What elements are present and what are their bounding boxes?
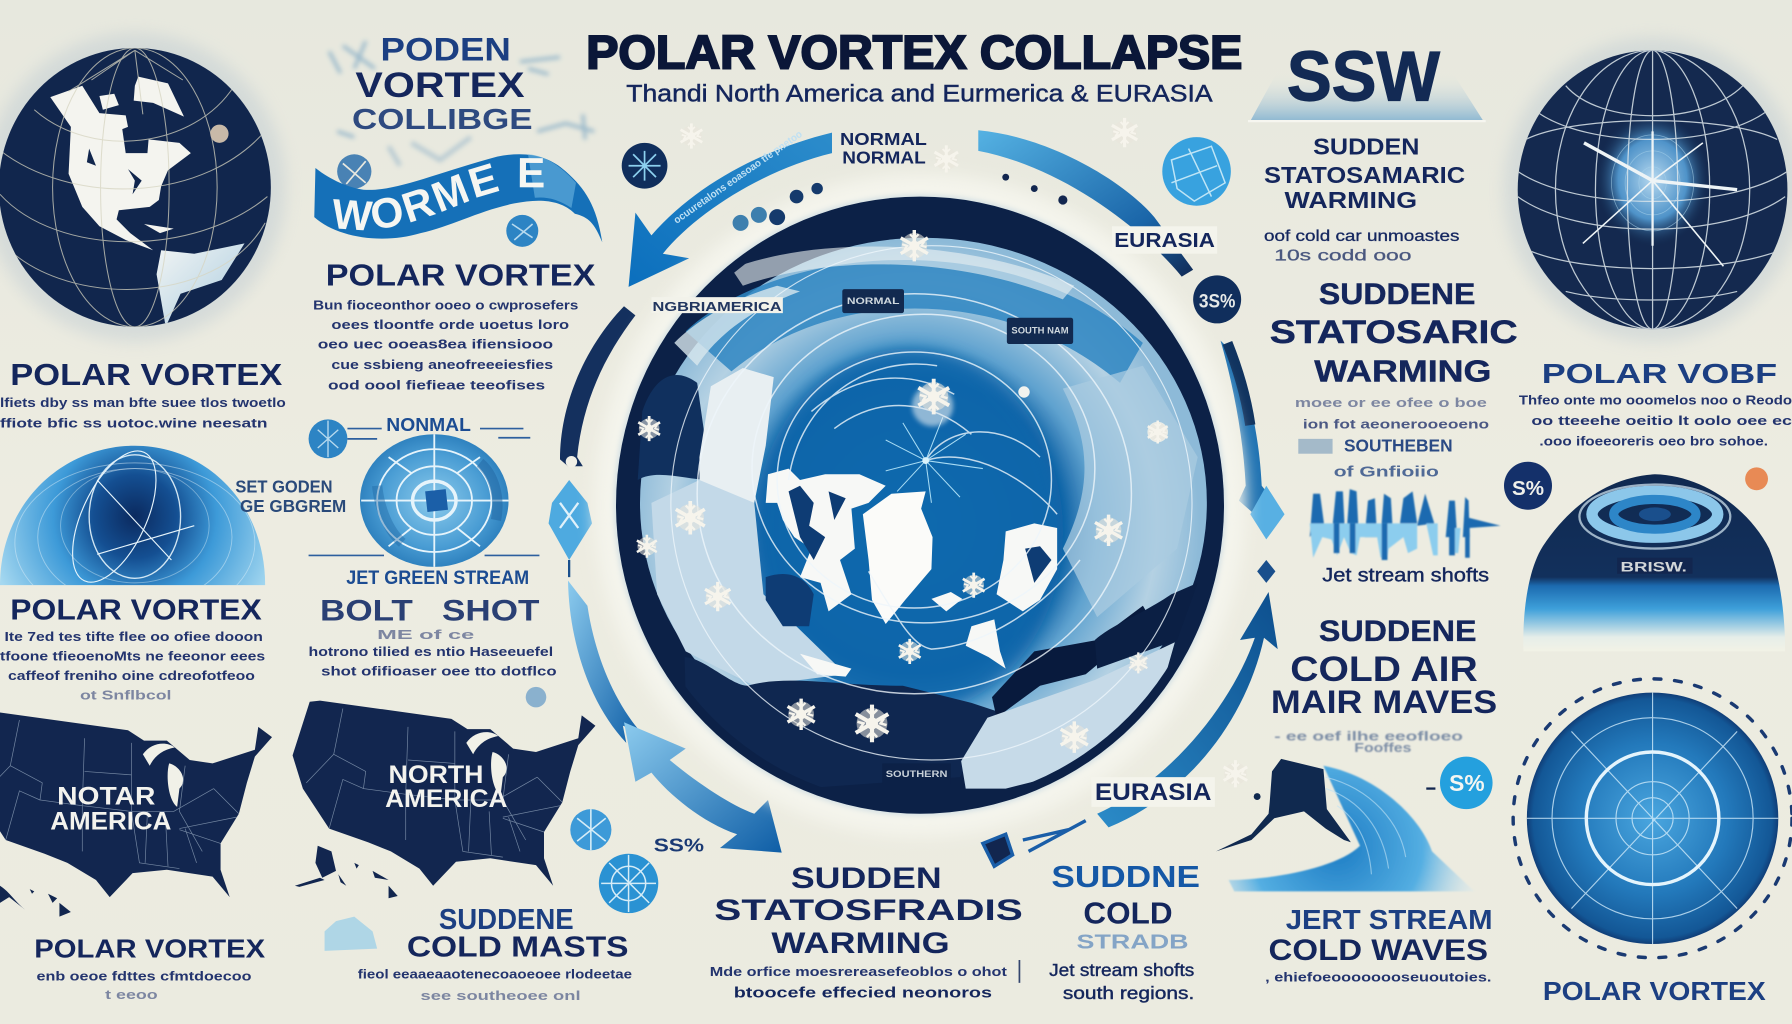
arrow: right band with ornament <box>1221 341 1285 583</box>
text: sudden cold masts: fieol eeaaeaaotenecoaoeoee rlodeetae <box>358 966 632 981</box>
text: polar vortex 4: Bun fioceonthor ooeo o cwprosefers <box>313 298 578 313</box>
heading: poden vortex collapse: VORTEX <box>355 65 525 105</box>
text: polar vortex 2: tfoone tfieoenoMts ne feeonor eees <box>0 649 265 664</box>
text: suddene statosaric warming: of Gnfioiio <box>1334 465 1439 481</box>
text: polar vortex 2: ot Snflbcol <box>80 687 171 702</box>
icon: vortex dome <box>0 446 266 586</box>
title: POLAR VORTEX COLLAPSE <box>586 27 1242 79</box>
icons around the disc: 3S% <box>1199 290 1235 312</box>
snowflakes on disc <box>637 230 1168 753</box>
text: polar vortex 1: ffiote bfic ss uotoc.wine neesatn <box>0 415 267 430</box>
text: sudden cold masts: SUDDENE <box>439 904 574 936</box>
text: polar vortex 3: enb oeoe fdttes cfmtdoecoo <box>37 969 251 984</box>
ribbon: worme: WORME E <box>333 158 544 230</box>
archipelago <box>766 469 886 611</box>
heading: poden vortex collapse <box>329 32 594 189</box>
map: left north america: NOTAR <box>57 783 155 811</box>
label: set goden: GE GBGREM <box>240 496 346 516</box>
text: jet stream bolt shot: ME of ce <box>377 627 474 642</box>
text: suddene cold air: Fooffes <box>1354 741 1411 755</box>
text: polar vortex 4: cue ssbieng aneofreeeiesfies <box>331 357 553 372</box>
text: sudden stratospheric warming center: WARMING <box>771 927 950 960</box>
text: sudden statosamaric warming <box>1264 133 1465 265</box>
icon: vortex dome right: BRISW. <box>1621 559 1687 574</box>
disc labels: SOUTH NAM <box>1011 326 1069 336</box>
map: north america <box>293 701 595 898</box>
text: sudden statosamaric warming: oof cold car unmoastes <box>1264 228 1459 245</box>
text: polar vobf: Thfeo onte mo ooomelos noo o Reodo <box>1519 393 1792 408</box>
streak band top <box>686 260 1143 383</box>
text: suddne cold stradb: SUDDNE <box>1051 859 1200 894</box>
text: sudden cold masts: see southeoee onl <box>421 988 581 1003</box>
text: suddene statosaric warming: SUDDENE <box>1319 278 1475 311</box>
globe: vortex top right <box>1504 38 1792 342</box>
icon: normal globe with label <box>309 414 539 567</box>
label: jet stream shifts: Jet stream shofts <box>1322 565 1489 587</box>
text: jet stream bolt shot: BOLT SHOT <box>320 595 539 628</box>
text: sudden statosamaric warming: 10s codd ooo <box>1274 248 1412 265</box>
icons: small circles and ss%: SS% <box>654 834 704 855</box>
burst <box>886 417 983 503</box>
text: polar vortex 2: caffeof freniho oine cdreofotfeoo <box>8 668 255 683</box>
text: sudden stratospheric warming center: SUDDEN <box>791 862 942 895</box>
heading: ssw: SSW <box>1287 38 1440 117</box>
text: jet stream bolt shot <box>309 567 557 678</box>
arrow: top left <box>629 129 832 287</box>
labels: normal and eurasia <box>840 129 1217 807</box>
text: polar vobf: .ooo ifoeeoreris oeo bro sohoe. <box>1539 434 1768 449</box>
icon: alaska with wave <box>1216 757 1493 891</box>
text: suddne cold stradb: COLD <box>1083 895 1173 930</box>
text: sudden stratospheric warming center: btoocefe effecied neonoros <box>734 986 992 1002</box>
text: polar vortex 4: oees tloontfe orde uoetus loro <box>331 317 569 332</box>
text: sudden statosamaric warming: STATOSAMARIC <box>1264 162 1465 188</box>
text: jert stream cold waves: COLD WAVES <box>1269 934 1488 967</box>
labels: normal and eurasia: EURASIA <box>1114 229 1215 252</box>
text: polar vortex 4: oeo uec ooeas8ea ifiensiooo <box>318 337 553 352</box>
text: suddne cold stradb: STRADB <box>1077 931 1189 954</box>
text: sudden statosamaric warming: WARMING <box>1285 187 1417 213</box>
text: jert stream cold waves: , ehiefoeoooooooseuoutoies. <box>1265 970 1491 985</box>
text: polar vortex 4: POLAR VORTEX <box>326 258 596 293</box>
map: left north america <box>0 712 272 917</box>
text: jert stream cold waves: JERT STREAM <box>1286 904 1493 935</box>
text: polar vobf: POLAR VOBF <box>1542 358 1777 389</box>
title <box>586 27 1242 108</box>
text: suddene statosaric warming <box>1270 278 1518 481</box>
text: polar vortex 2: POLAR VORTEX <box>10 594 262 626</box>
text: suddene cold air: COLD AIR <box>1290 649 1478 689</box>
arrow: left navy band <box>560 306 635 467</box>
text: polar vortex 4 <box>313 258 596 393</box>
text: suddne cold stradb: south regions. <box>1063 983 1194 1003</box>
map: north america: AMERICA <box>385 785 507 813</box>
text: suddene statosaric warming: ion fot aeonerooeoeno <box>1303 417 1489 432</box>
text: polar vortex 2 <box>0 594 265 702</box>
text: sudden cold masts <box>325 904 632 1003</box>
text: jet stream bolt shot: hotrono tilied es ntio Haseeuefel <box>309 644 553 659</box>
label: set goden <box>235 477 346 516</box>
pale left land <box>699 368 774 503</box>
dark left land <box>638 375 711 480</box>
ribbon: worme <box>314 154 602 247</box>
text: polar vobf <box>1519 358 1792 449</box>
scandinavia <box>997 523 1057 611</box>
disc labels <box>651 289 1073 784</box>
arrow: bottom right <box>1097 592 1278 827</box>
text: jet stream bolt shot: shot ofifioaser oee tto dotflco <box>321 663 557 678</box>
disc labels: NORMAL <box>847 296 900 306</box>
map: left north america: AMERICA <box>50 808 171 836</box>
text: polar vortex 3: POLAR VORTEX <box>34 934 266 964</box>
jet lines <box>671 246 1192 760</box>
text: suddene cold air: MAIR MAVES <box>1271 684 1497 720</box>
text: polar vortex 1: POLAR VORTEX <box>10 357 283 392</box>
icon: vortex dome right <box>1523 474 1785 651</box>
text: polar vortex 1: lfiets dby ss man bfte suee tlos twoetlo <box>0 395 286 410</box>
text: suddene cold air <box>1271 615 1497 755</box>
text: polar vortex 1 <box>0 357 286 430</box>
central polar disc <box>594 174 1246 837</box>
chart: jet stream waveform <box>1310 489 1501 560</box>
right pale streak <box>1063 366 1198 617</box>
icons around the disc <box>622 118 1247 866</box>
text: suddene cold air: SUDDENE <box>1319 615 1477 648</box>
icon: blue polar globe <box>1513 679 1792 958</box>
deep blue core <box>754 349 1063 714</box>
text: suddne cold stradb: Jet stream shofts <box>1049 960 1194 980</box>
label: polar vortex bottom right: POLAR VORTEX <box>1543 976 1766 1006</box>
heading: ssw <box>1248 38 1486 121</box>
text: sudden stratospheric warming center: Mde orfice moesrereasefeoblos o ohot <box>710 964 1008 979</box>
map: north america: NORTH <box>389 761 483 789</box>
icon: normal globe with label: NONMAL <box>386 414 471 435</box>
text: suddne cold stradb <box>1049 859 1200 1003</box>
arrow: top right <box>978 130 1193 277</box>
text: suddene statosaric warming: WARMING <box>1314 354 1491 389</box>
arrow: bottom left 1 <box>549 480 640 743</box>
greenland <box>863 491 933 624</box>
arrow: top left: ocuuretalons eoasoao tfe pnetoo <box>672 129 805 226</box>
text: suddene cold air: - ee oef ilhe eeofloeo <box>1274 730 1463 744</box>
text: polar vortex 3: t eeoo <box>105 987 158 1002</box>
text: sudden stratospheric warming center <box>710 862 1023 1002</box>
globe: Americas, top left <box>0 33 286 342</box>
heading: poden vortex collapse: COLLIBGE <box>352 104 533 136</box>
label: set goden: SET GODEN <box>235 477 333 497</box>
text: suddene statosaric warming: moee or ee ofee o boe <box>1295 395 1487 410</box>
icon: alaska with wave: S% <box>1449 770 1485 796</box>
arrow: bottom left 2 <box>624 722 782 853</box>
text: jert stream cold waves <box>1265 904 1493 985</box>
subtitle: Thandi North America and Eurmerica & EURASIA <box>626 81 1213 108</box>
disc labels: SOUTHERN <box>886 769 947 779</box>
text: sudden cold masts: COLD MASTS <box>407 932 629 964</box>
bottom dark land <box>685 657 1006 789</box>
text: sudden statosamaric warming: SUDDEN <box>1313 133 1419 159</box>
icons: small circles and ss% <box>526 687 704 913</box>
text: sudden stratospheric warming center: STATOSFRADIS <box>714 894 1023 927</box>
text: jet stream bolt shot: JET GREEN STREAM <box>346 567 529 589</box>
heading: poden vortex collapse: PODEN <box>381 32 511 68</box>
text: suddene statosaric warming: STATOSARIC <box>1270 314 1518 350</box>
text: polar vortex 4: ood oool fiefieae teeofises <box>328 378 545 393</box>
text: polar vortex 2: Ite 7ed tes tifte flee oo ofiee dooon <box>5 629 263 644</box>
text: suddene statosaric warming: SOUTHEBEN <box>1344 435 1453 455</box>
labels: normal and eurasia: NORMAL <box>842 147 926 167</box>
labels: normal and eurasia: NORMAL <box>840 129 927 149</box>
labels: normal and eurasia: EURASIA <box>1095 779 1211 806</box>
disc labels: NGBRIAMERICA <box>653 300 782 314</box>
text: polar vobf: oo tteeehe oeitio lt oolo oee ec <box>1531 413 1792 428</box>
text: polar vortex 3 <box>34 934 266 1002</box>
icon: badge and dot <box>1504 462 1768 510</box>
icon: badge and dot: S% <box>1512 477 1544 500</box>
